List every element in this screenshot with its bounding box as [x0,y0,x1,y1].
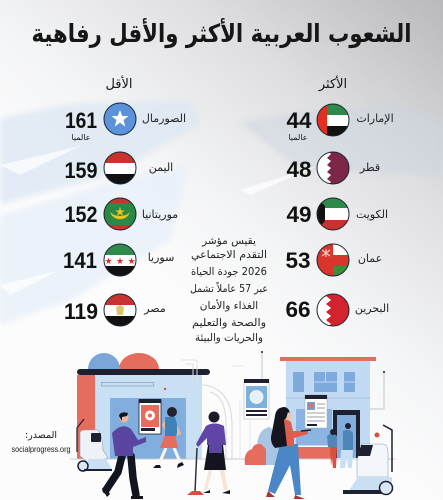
row: Mauritania [64,196,178,232]
row: Oman: عمان [358,252,382,265]
source: المصدر: [25,430,57,441]
robot: right [343,425,392,494]
row: Qatar: قطر [359,161,380,174]
row: Yemen [64,150,173,186]
column: most prosperous [286,104,394,327]
person: man in purple [102,412,146,499]
row: Syria [63,243,174,278]
row: Kuwait: 49 [286,202,312,227]
row: Egypt [64,293,166,328]
poster card [244,379,269,419]
description text: والصحة والتعليم [192,317,266,329]
description text: الغذاء والأمان [200,299,258,312]
row: Oman [286,243,382,279]
description text: يقيس مؤشر [201,235,256,247]
source [12,430,71,454]
row: Yemen: اليمن [149,161,173,174]
heading: most: الأكثر [318,75,347,92]
profile card [305,395,327,428]
person: woman with phone [266,407,311,499]
bush [245,427,282,465]
row: Syria: سوريا [148,251,174,264]
row: Kuwait: الكويت [356,208,388,221]
row: Somalia: عالميا [71,133,91,142]
row: Oman: 53 [286,248,310,273]
row: Bahrain: 66 [286,297,310,322]
phone card [139,399,161,434]
description text: والحريات والبيئة [195,332,263,344]
row: UAE: عالميا [288,133,308,142]
row: UAE [286,104,394,142]
row: Bahrain: البحرين [355,302,389,315]
row: Somalia: 161 [65,108,97,133]
heading: least: الأقل [105,75,133,92]
row: Qatar: 48 [286,157,312,182]
row: UAE: 44 [286,108,312,133]
row: Syria: ★ [116,257,124,267]
row: Syria: ★ [127,257,136,267]
row: Syria: ★ [104,257,113,267]
row: Syria: 141 [63,248,97,273]
source: socialprogress.org [12,444,71,454]
description text [190,235,268,344]
description text: 2026 جودة الحياة [191,266,267,278]
person: woman with broom [187,412,230,495]
illustration: street scene [70,351,395,499]
couple in doorway [327,423,353,468]
row: Egypt: مصر [143,302,166,315]
person: woman in red skirt [153,407,184,468]
row: Mauritania: موريتانيا [142,208,178,221]
row: Bahrain [286,293,389,327]
row: Mauritania: 152 [64,202,98,227]
description text: التقدم الاجتماعي [191,249,267,261]
row: Somalia [65,103,186,142]
row: Qatar [286,150,380,186]
column: least prosperous [63,103,186,328]
right building [225,351,395,465]
row: UAE: الإمارات [356,112,394,125]
description text: عبر 57 عاملاً تشمل [190,281,268,295]
row: Yemen: 159 [64,158,98,183]
row: Egypt: 119 [64,299,98,324]
left building [70,353,250,460]
robot: left [77,419,112,471]
row: Somalia: الصورمال [142,112,186,125]
row: Kuwait [286,197,388,232]
